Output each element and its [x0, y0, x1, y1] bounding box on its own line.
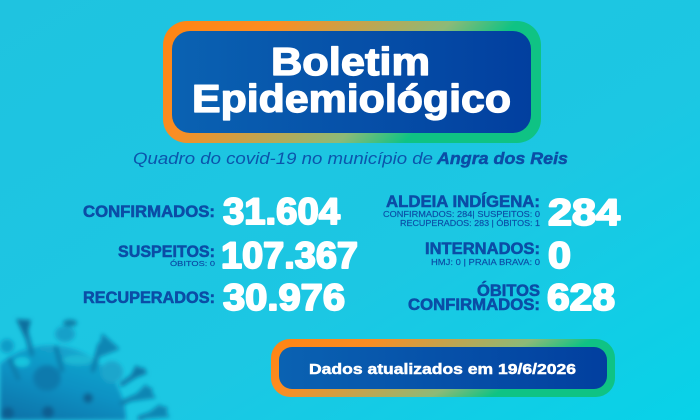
stat: confirmados — [83, 191, 340, 232]
subtitle: Quadro do covid-19 no município de — [133, 149, 433, 168]
stat: recuperados: RECUPERADOS: — [83, 289, 215, 307]
banner frame — [163, 21, 541, 143]
title banner — [163, 21, 541, 143]
title: Boletim: Boletim — [271, 41, 430, 84]
subtitle — [133, 149, 568, 168]
update date text: Dados atualizados em 19/6/2026 — [309, 361, 576, 378]
stat: suspeitos — [118, 235, 358, 276]
value: 628: 628 — [547, 277, 615, 318]
value: 107.367: 107.367 — [221, 235, 358, 276]
aldeia detail line 1: CONFIRMADOS: 284| SUSPEITOS: 0 — [383, 209, 540, 219]
update panel — [279, 347, 607, 389]
stat: internados: INTERNADOS: — [425, 240, 540, 258]
stat: obitos confirmados: ÓBITOS — [477, 281, 540, 300]
title: Epidemiológico: Epidemiológico — [192, 78, 511, 121]
suspeitos note: ÓBITOS: 0 — [170, 259, 215, 268]
value: 31.604: 31.604 — [223, 191, 340, 232]
stat: aldeia indigena — [383, 192, 620, 233]
value: 0: 0 — [548, 235, 571, 276]
value: 30.976: 30.976 — [223, 277, 345, 318]
stat: aldeia indigena: ALDEIA INDÍGENA: — [386, 192, 540, 211]
stat: confirmados: CONFIRMADOS: — [83, 203, 215, 221]
internados detail: HMJ: 0 | PRAIA BRAVA: 0 — [431, 257, 540, 267]
stat: suspeitos: SUSPEITOS: — [118, 243, 215, 261]
icon: virus illustration — [0, 319, 170, 420]
aldeia detail line 2: RECUPERADOS: 283 | ÓBITOS: 1 — [400, 218, 540, 228]
stat: recuperados — [83, 277, 345, 318]
obitos label line 2: CONFIRMADOS: — [408, 296, 540, 314]
stat: obitos confirmados — [408, 277, 615, 318]
stat: internados — [425, 235, 571, 276]
update frame — [271, 339, 615, 397]
value: 284: 284 — [548, 192, 620, 233]
subtitle place name: Angra dos Reis — [436, 149, 568, 168]
update banner — [271, 339, 615, 397]
banner panel — [172, 31, 531, 133]
